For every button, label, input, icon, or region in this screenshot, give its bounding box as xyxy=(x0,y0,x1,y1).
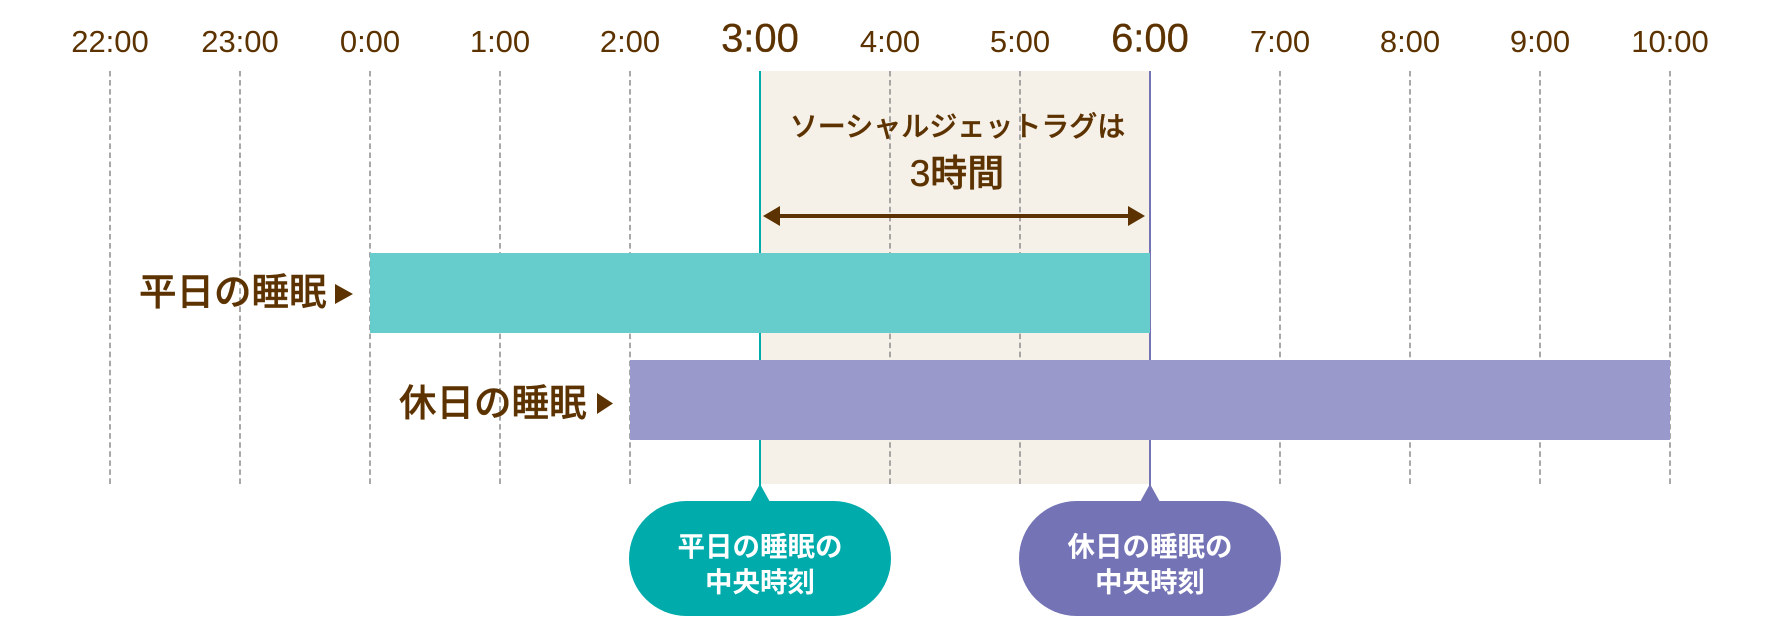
callout: weekend sleep midpoint: 中央時刻 xyxy=(1095,566,1205,598)
callout: weekday sleep midpoint: 平日の睡眠の xyxy=(678,531,842,562)
time axis labels: 5:00 xyxy=(990,24,1050,59)
time axis labels: 9:00 xyxy=(1510,24,1570,59)
time axis labels: 0:00 xyxy=(340,24,400,59)
bar: weekend sleep xyxy=(630,360,1670,440)
callout: weekday sleep midpoint xyxy=(629,484,891,616)
callout: weekday sleep midpoint: 中央時刻 xyxy=(705,566,815,598)
heading: social jet lag text: ソーシャルジェットラグは xyxy=(790,111,1125,142)
time axis labels: 8:00 xyxy=(1380,24,1440,59)
callout: weekend sleep midpoint: 休日の睡眠の xyxy=(1068,531,1232,562)
callout: weekend sleep midpoint xyxy=(1019,484,1281,616)
time axis labels: 10:00 xyxy=(1631,24,1709,59)
time axis labels: 6:00 xyxy=(1111,16,1189,60)
time axis labels: 1:00 xyxy=(470,24,530,59)
marker line: weekend sleep midpoint xyxy=(1149,71,1151,490)
time axis labels: 2:00 xyxy=(600,24,660,59)
highlighted panel: social jet lag range xyxy=(760,71,1150,484)
value: 3 hours: 3時間 xyxy=(910,153,1004,194)
time axis labels: 23:00 xyxy=(201,24,279,59)
marker line: weekday sleep midpoint xyxy=(759,71,761,490)
time axis labels: 4:00 xyxy=(860,24,920,59)
time axis labels: 22:00 xyxy=(71,24,149,59)
arrow: 3 hour span xyxy=(763,206,1145,226)
time axis labels: 7:00 xyxy=(1250,24,1310,59)
time axis labels xyxy=(71,16,1709,60)
bar: weekday sleep xyxy=(370,253,1150,333)
label: weekday sleep: 平日の睡眠 xyxy=(139,271,326,313)
label: weekend sleep: 休日の睡眠 xyxy=(399,382,586,424)
time axis labels: 3:00 xyxy=(721,16,799,60)
